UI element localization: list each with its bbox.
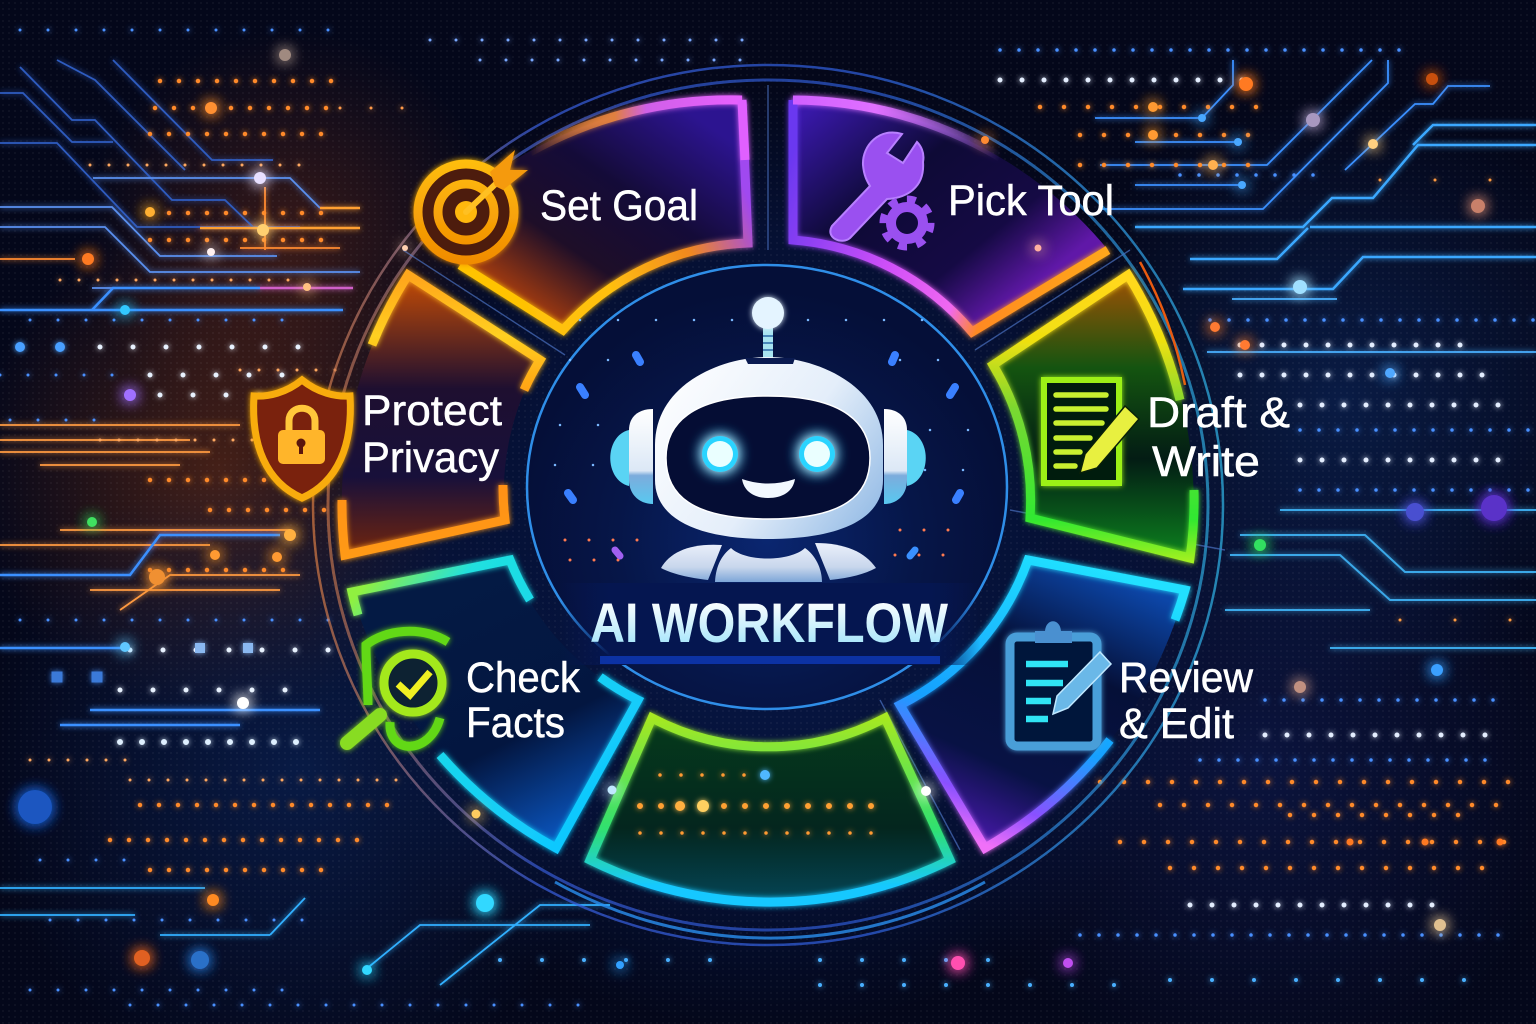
icon: robot smile	[742, 479, 795, 498]
label: protect privacy	[362, 387, 502, 482]
label: protect privacy: Privacy	[362, 434, 499, 482]
gap sparkles	[402, 136, 1042, 818]
label: protect privacy: Protect	[362, 387, 502, 435]
circuit traces left	[0, 60, 610, 985]
title banner	[560, 583, 980, 665]
panel: set goal	[420, 100, 748, 330]
label: pick tool: Pick Tool	[948, 177, 1114, 225]
label: draft and write: Draft &	[1147, 389, 1290, 437]
title banner: AI WORKFLOW	[590, 591, 948, 654]
label: draft and write	[1147, 389, 1290, 486]
panel: review and edit	[900, 560, 1185, 848]
label: check facts	[466, 654, 580, 747]
icon: wrench and gear	[830, 132, 931, 247]
icon: target	[418, 150, 528, 260]
robot mascot	[610, 297, 926, 582]
label: check facts: Check	[466, 654, 580, 702]
outer rings	[313, 65, 1225, 945]
icon: clipboard with pencil	[1010, 621, 1111, 746]
icon: robot shoulders	[661, 543, 876, 582]
data dots right and bottom	[500, 50, 1536, 985]
panel: pick tool	[793, 100, 1108, 332]
label: review and edit	[1119, 654, 1254, 748]
panel: bottom segment	[590, 718, 950, 902]
icon: document with pencil	[1044, 380, 1139, 483]
panel: draft and write	[993, 275, 1194, 558]
circuit traces right	[1095, 60, 1536, 648]
label: review and edit: & Edit	[1119, 700, 1234, 748]
icon: robot eyes	[702, 436, 835, 472]
label: review and edit: Review	[1119, 654, 1254, 702]
icon: robot ears	[610, 409, 926, 504]
panel: protect privacy	[342, 275, 540, 555]
icon: robot head	[655, 357, 883, 539]
icon: shield with lock	[254, 380, 350, 498]
label: set goal: Set Goal	[540, 182, 698, 230]
centre hub	[527, 265, 1007, 709]
icon: magnifier with check	[347, 631, 448, 746]
icon: robot antenna	[752, 297, 784, 362]
data dots left and top	[0, 30, 760, 1005]
label: draft and write: Write	[1152, 438, 1260, 486]
label: check facts: Facts	[466, 699, 565, 747]
panel: check facts	[352, 560, 638, 848]
